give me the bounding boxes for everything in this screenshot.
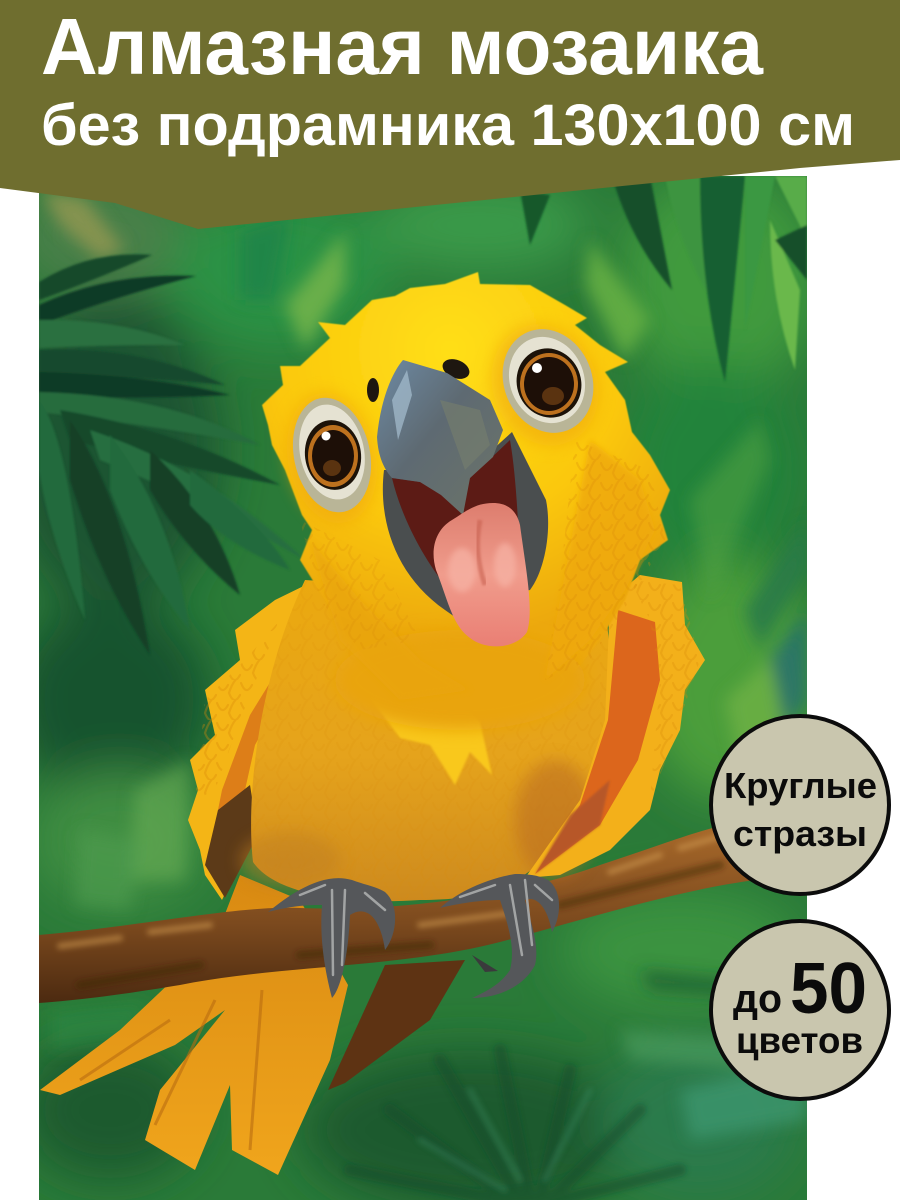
number 50: 50 bbox=[790, 949, 867, 1029]
right wing bbox=[525, 575, 705, 878]
header banner bbox=[0, 0, 900, 229]
jungle background bbox=[0, 170, 820, 1200]
badge: up to 50 colours bbox=[711, 921, 889, 1099]
chest tuft bbox=[384, 714, 492, 784]
nostrils bbox=[367, 359, 470, 402]
branch bbox=[39, 825, 755, 1003]
left foot bbox=[268, 878, 395, 998]
tongue bbox=[434, 503, 530, 646]
label: colours: цветов bbox=[736, 1020, 863, 1061]
dark tail feather bbox=[328, 960, 465, 1090]
left wing bbox=[188, 586, 302, 900]
subtitle: без подрамника 130х100 см bbox=[41, 93, 855, 158]
palm leaves left bbox=[39, 254, 305, 655]
head bbox=[262, 272, 670, 730]
brush strokes bbox=[40, 190, 807, 1140]
mouth interior bbox=[392, 440, 520, 585]
lower beak bbox=[383, 432, 548, 622]
tail feathers bbox=[40, 875, 465, 1175]
label: do: до bbox=[733, 977, 782, 1021]
bottom ferns bbox=[350, 1050, 680, 1200]
badge: round rhinestones bbox=[711, 716, 889, 894]
right eye bbox=[502, 329, 594, 433]
badge text line 2: стразы bbox=[733, 813, 867, 854]
palm leaves top right bbox=[520, 176, 807, 382]
left eye bbox=[292, 398, 372, 512]
parrot bbox=[188, 272, 705, 998]
parrot painting bbox=[0, 170, 820, 1200]
upper beak bbox=[377, 360, 503, 515]
title: Алмазная мозаика bbox=[41, 2, 763, 91]
badge text line 1: Круглые bbox=[724, 765, 877, 806]
body bbox=[240, 580, 609, 901]
right foot bbox=[440, 874, 559, 998]
